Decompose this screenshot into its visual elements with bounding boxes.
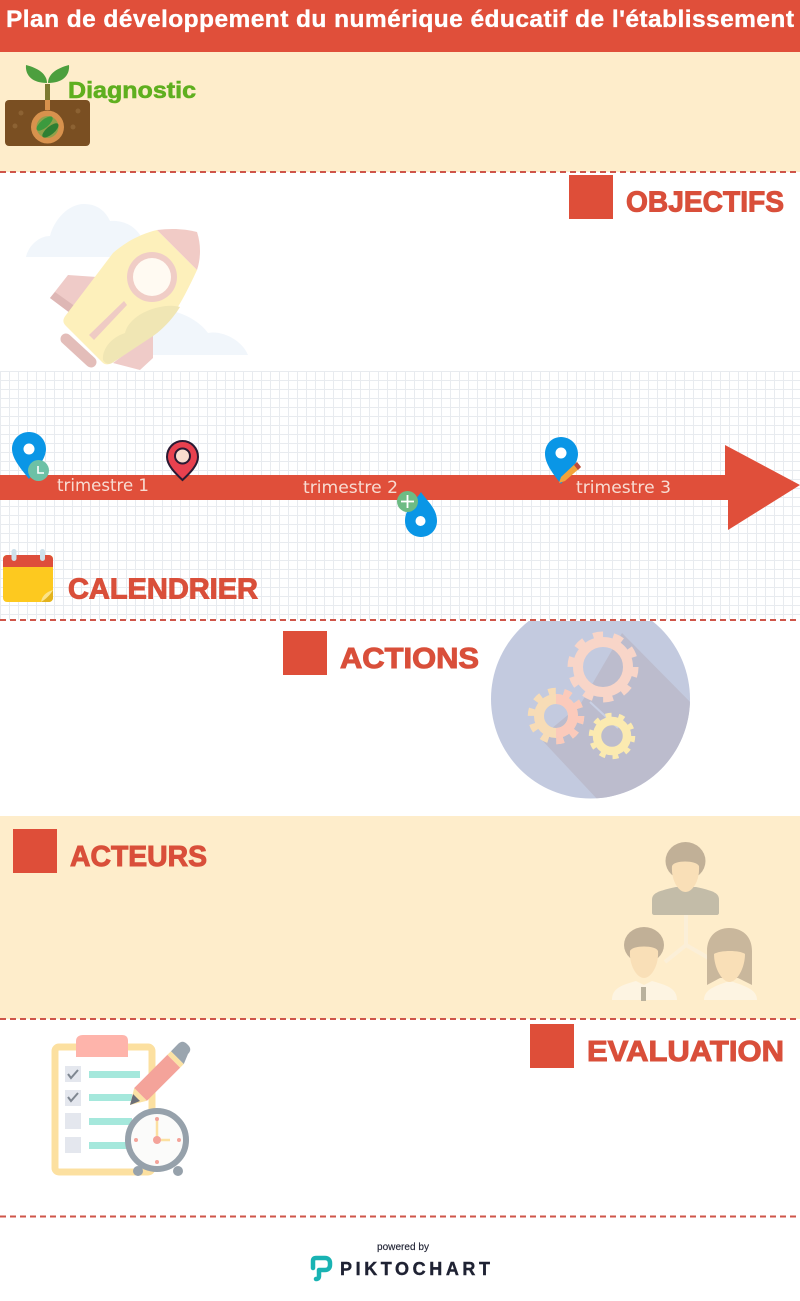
icon: blue pin with pencil	[545, 437, 581, 484]
icon: gears in circle	[491, 621, 690, 798]
icon: seed sprouting in soil	[5, 65, 90, 146]
heading: Diagnostic: Diagnostic	[68, 77, 196, 103]
heading: Evaluation	[530, 1024, 784, 1068]
Piktochart wordmark: PIKTOCHART	[340, 1259, 490, 1279]
arrow: timeline	[0, 445, 800, 530]
heading: Actions	[283, 631, 479, 675]
label: trimestre 1: trimestre 1	[57, 476, 149, 495]
panel: calendar grid background	[0, 371, 800, 620]
heading: Evaluation: EVALUATION	[587, 1036, 784, 1068]
icon: blue pin with clock	[12, 432, 49, 481]
heading: Calendrier: CALENDRIER	[68, 574, 258, 606]
icon: Piktochart logo	[313, 1258, 330, 1279]
title banner	[0, 0, 800, 52]
heading: Acteurs	[13, 829, 207, 873]
heading: Objectifs: OBJECTIFS	[626, 186, 784, 218]
icon: checklist with pencil and clock	[55, 1035, 190, 1176]
heading: Actions: ACTIONS	[340, 643, 479, 675]
title: Plan de développement du numérique éducatif de l'établissement	[6, 6, 794, 33]
icon: team hierarchy	[612, 842, 757, 1001]
icon: blue pin with plus	[397, 491, 437, 537]
panel: diagnostic background	[0, 52, 800, 172]
icon: red pin	[167, 441, 198, 480]
label: trimestre 3: trimestre 3	[576, 478, 671, 497]
heading: Acteurs: ACTEURS	[70, 841, 207, 873]
heading: Objectifs	[569, 175, 784, 219]
label: trimestre 2: trimestre 2	[303, 478, 398, 497]
powered by text: powered by	[377, 1242, 429, 1253]
panel: acteurs background	[0, 816, 800, 1019]
footer: powered by Piktochart	[313, 1242, 490, 1279]
icon: rocket and clouds	[26, 204, 248, 370]
icon: calendar	[3, 549, 53, 602]
